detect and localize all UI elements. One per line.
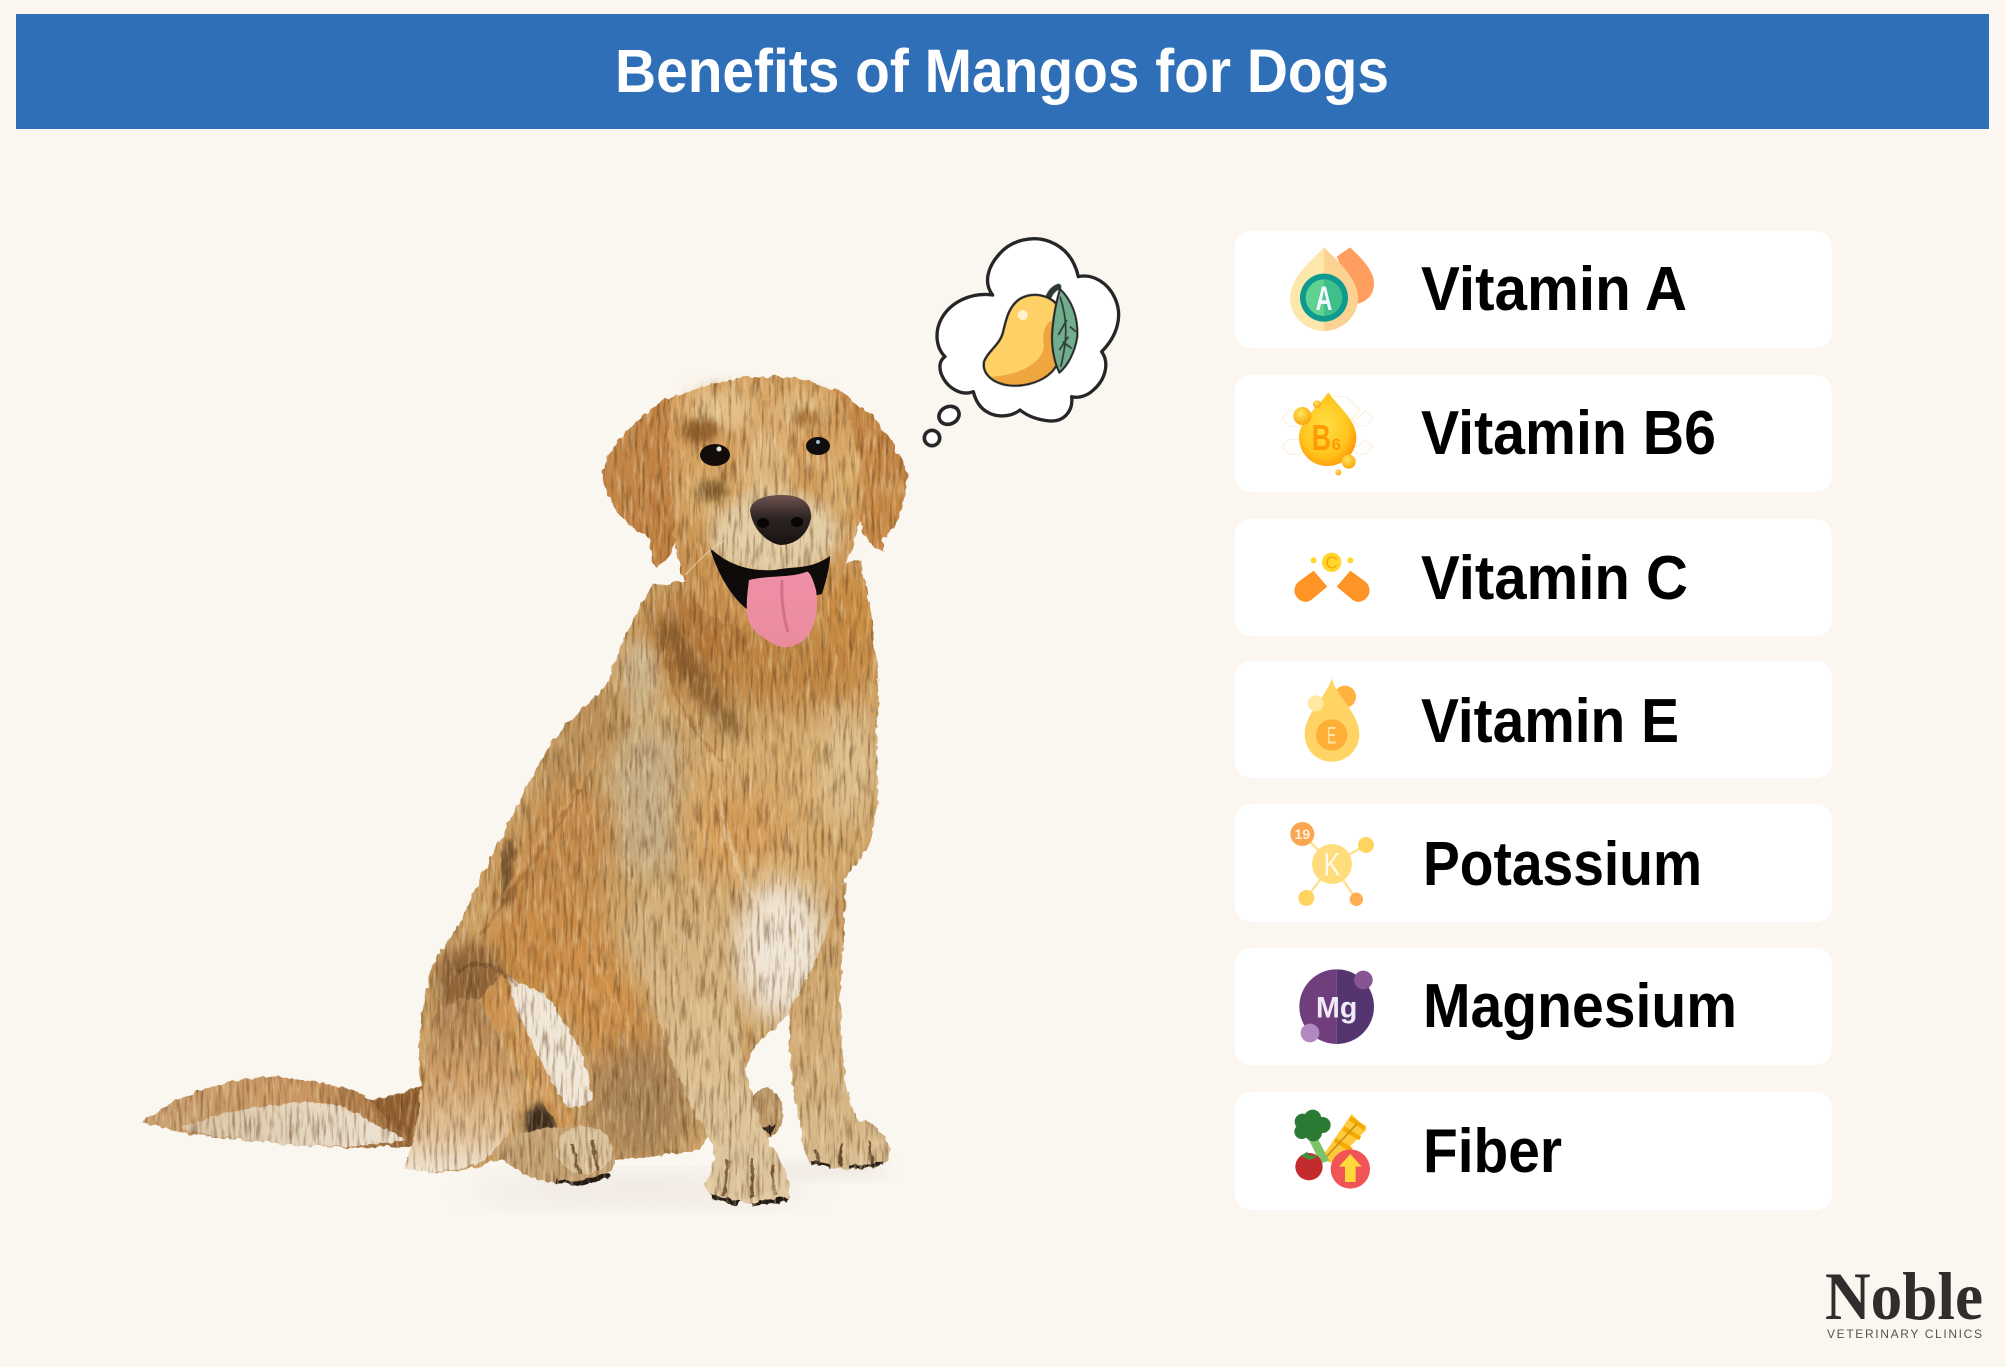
icon: vitamin B6 drop: B xyxy=(1312,417,1331,458)
muzzle xyxy=(709,491,841,579)
rear thigh xyxy=(404,998,518,1172)
icon: potassium atom xyxy=(1290,822,1374,906)
fur colour zones xyxy=(436,562,882,1160)
icon: fiber foods xyxy=(1294,1110,1370,1189)
icon: vitamin B6 drop xyxy=(1282,392,1373,475)
ground shadow xyxy=(470,1163,890,1202)
tongue xyxy=(747,572,817,647)
card: Potassium xyxy=(1235,804,1832,922)
icon: vitamin C capsule xyxy=(1294,553,1370,602)
icon: vitamin C capsule: C xyxy=(1325,553,1338,573)
icon: vitamin A drop: A xyxy=(1316,280,1332,318)
label: Fiber xyxy=(1423,1117,1562,1186)
label: Vitamin B6 xyxy=(1421,399,1716,468)
logo: VETERINARY CLINICS xyxy=(1827,1327,1982,1341)
flank sweep xyxy=(478,970,575,1130)
far paw behind leg xyxy=(747,1088,783,1138)
left ear xyxy=(603,395,700,567)
cloud xyxy=(937,239,1119,421)
icon: vitamin B6 drop: 6 xyxy=(1332,435,1341,454)
card: Vitamin C xyxy=(1235,519,1832,636)
card: Vitamin E xyxy=(1235,661,1832,778)
whiskers xyxy=(685,540,725,575)
icon: vitamin E drop xyxy=(1305,678,1359,762)
icon: potassium atom: 19 xyxy=(1295,826,1310,842)
icon: vitamin A drop xyxy=(1290,247,1374,331)
near front leg xyxy=(640,879,790,1204)
mouth xyxy=(710,548,830,610)
thought bubble xyxy=(924,239,1119,446)
far front leg xyxy=(788,880,890,1169)
left eye xyxy=(700,444,730,466)
dog head xyxy=(603,377,907,633)
dog illustration xyxy=(143,377,907,1204)
icon: magnesium circle xyxy=(1299,969,1374,1044)
mango fruit xyxy=(984,295,1058,386)
white belly patch xyxy=(508,977,592,1108)
title banner xyxy=(16,14,1989,129)
card: Vitamin A xyxy=(1235,231,1832,348)
label: Vitamin C xyxy=(1421,544,1688,613)
tail xyxy=(143,1077,428,1148)
card: Vitamin B6 xyxy=(1235,375,1832,492)
card: Magnesium xyxy=(1235,948,1832,1065)
title: Benefits of Mangos for Dogs xyxy=(615,37,1389,105)
nose xyxy=(750,495,811,545)
right ear xyxy=(825,388,907,552)
photo backdrop xyxy=(122,243,1148,1270)
label: Potassium xyxy=(1423,830,1702,899)
face colour patches xyxy=(680,388,858,522)
right eye xyxy=(806,437,830,455)
card: Fiber xyxy=(1235,1092,1832,1210)
mango stem xyxy=(1048,287,1058,297)
logo: Noble xyxy=(1825,1258,1983,1334)
rear paw xyxy=(492,1126,615,1184)
panel: nutrient list xyxy=(1235,231,1832,1210)
mango leaf xyxy=(1052,289,1077,373)
label: Vitamin A xyxy=(1421,255,1687,324)
torso xyxy=(404,560,878,1172)
icon: vitamin E drop: E xyxy=(1327,723,1336,750)
label: Vitamin E xyxy=(1421,687,1679,756)
label: Magnesium xyxy=(1423,972,1737,1041)
skull xyxy=(668,377,860,633)
icon: magnesium circle: Mg xyxy=(1316,991,1357,1024)
icon: potassium atom: K xyxy=(1324,846,1340,883)
fur strokes xyxy=(460,640,835,1100)
small bubbles xyxy=(924,403,962,446)
